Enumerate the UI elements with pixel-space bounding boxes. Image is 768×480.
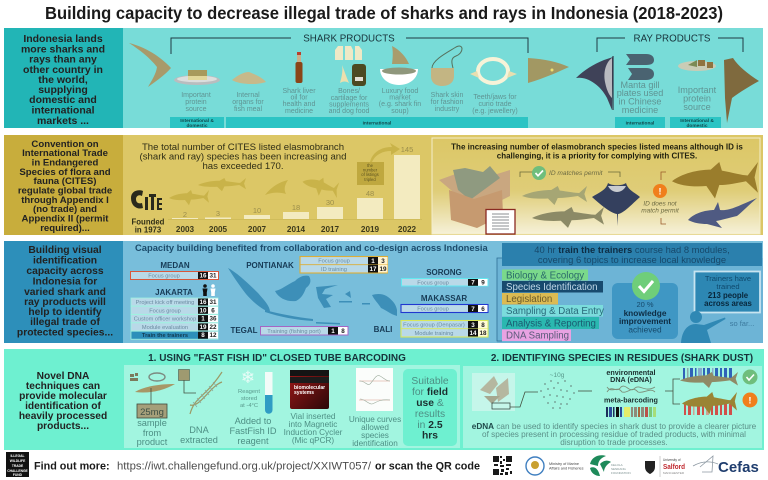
product labels: curio trade xyxy=(478,101,512,108)
product labels: organs for xyxy=(232,99,264,106)
city: Pontianak: ID training xyxy=(321,267,347,273)
shark silhouettes xyxy=(169,143,400,205)
product labels: source xyxy=(683,102,711,112)
panel: CITES lead text: (no trade) and xyxy=(33,204,97,215)
logo: foundation: KELOLA xyxy=(611,463,623,467)
find out more xyxy=(34,460,480,472)
product labels: medicine xyxy=(285,108,313,115)
callout: listings tripled xyxy=(357,162,384,185)
panel: shark and ray products xyxy=(4,28,763,129)
find out more: Find out more: xyxy=(34,460,110,472)
DNA lead text: products... xyxy=(37,421,89,432)
panel: CITES lead text: Appendix II (permit xyxy=(22,214,109,224)
eDNA meta-barcoding: environmental xyxy=(606,368,656,377)
step: reagent: stored xyxy=(241,396,257,402)
product labels: and dog food xyxy=(329,108,370,115)
non-matching sharks xyxy=(672,162,758,228)
product labels: (e.g. jewellery) xyxy=(472,108,518,115)
panel: DNA techniques xyxy=(4,349,764,450)
panel: products lead text: domestic and xyxy=(29,94,97,106)
logo: Cefas: Cefas xyxy=(718,459,759,476)
CITES chart heading: The total number of CITES listed elasmobranch xyxy=(142,142,344,153)
city: Jakarta: Focus group xyxy=(149,308,181,314)
product labels: protein xyxy=(683,94,711,104)
bar chart: CITES listings: 18 xyxy=(292,203,300,212)
trainer board: trained xyxy=(716,282,740,291)
city: Jakarta: Project kick off meeting xyxy=(136,300,194,306)
panel: products lead text: markets ... xyxy=(37,115,89,127)
so far label: so far... xyxy=(730,319,754,328)
course summary banner: covering 6 topics to increase local knowledge xyxy=(538,254,726,265)
step: sample from product: product xyxy=(137,437,168,447)
city: Sorong: 9 xyxy=(481,280,485,286)
step: unique curves: allowed xyxy=(361,423,389,432)
product labels: Internal xyxy=(236,92,260,99)
bar chart: CITES listings: 2014 xyxy=(287,225,306,234)
product labels: oil for xyxy=(290,94,308,102)
logo: Illegal Wildlife Trade Challenge Fund xyxy=(6,452,29,477)
product labels: medicine xyxy=(622,105,658,115)
step: sample from product xyxy=(130,373,175,447)
step: unique curves: species xyxy=(361,431,389,440)
icon: bones and cartilage xyxy=(335,46,366,86)
knowledge improvement callout: knowledge xyxy=(624,308,667,318)
step: Mic qPCR: biomolecular xyxy=(294,385,325,391)
panel: products lead text xyxy=(4,28,123,128)
bar chart: CITES listings: 3 xyxy=(216,209,220,218)
logo: Illegal Wildlife Trade Challenge Fund: WILDLIFE xyxy=(10,459,26,463)
trainer board: across areas xyxy=(704,299,753,308)
market tags: International & xyxy=(180,118,214,124)
DNA lead text xyxy=(19,371,107,432)
panel: train the trainers xyxy=(497,243,763,343)
product labels: soup) xyxy=(391,108,409,115)
city: Tegal: TEGAL xyxy=(230,326,258,335)
icon: people legend xyxy=(202,284,216,296)
matched shark with barcode xyxy=(680,368,758,388)
founded label: Founded xyxy=(132,218,165,226)
logo: Cefas xyxy=(693,456,759,476)
city: Medan xyxy=(130,261,218,280)
footer xyxy=(6,452,759,477)
manta ray illustration xyxy=(576,56,613,110)
step: reagent: Added to xyxy=(235,416,271,426)
product labels: in Chinese xyxy=(619,96,661,106)
panel: CITES lead text: through Appendix I xyxy=(21,195,109,206)
city: Tegal: 1 xyxy=(331,328,335,335)
CITES chart heading: (shark and ray) species has been increasing and xyxy=(140,152,346,162)
step: reagent: Reagent xyxy=(238,389,260,395)
panel: CITES lead text xyxy=(4,135,123,235)
product labels: fish meal xyxy=(234,106,262,113)
panel: CITES lead text: fauna (CITES) xyxy=(34,176,96,187)
find out more: or scan the QR code xyxy=(375,460,480,472)
city: Pontianak: 3 xyxy=(381,258,385,265)
city: Bali: Module training xyxy=(415,331,453,337)
step: Mic qPCR: systems xyxy=(294,390,314,396)
city: Jakarta: JAKARTA xyxy=(155,288,193,297)
logo: Illegal Wildlife Trade Challenge Fund: ILLEGAL xyxy=(10,454,25,458)
panel: CITES lead text: Species of flora and xyxy=(19,167,111,178)
map of Indonesia xyxy=(228,268,397,324)
city: Jakarta xyxy=(131,284,218,339)
panel: capacity lead text: ray products will xyxy=(24,297,106,308)
panel: capacity lead text: Building visual xyxy=(28,245,102,256)
city: Medan: Focus group xyxy=(148,274,180,280)
knowledge improvement callout: 20 % xyxy=(636,300,654,309)
knowledge improvement callout: achieved xyxy=(628,324,662,334)
knowledge improvement callout: improvement xyxy=(619,316,671,326)
trainer board: 213 people xyxy=(708,291,749,300)
icon: manta gill plates xyxy=(626,54,654,80)
panel: CITES lead text: Convention on xyxy=(31,139,99,150)
product labels: Luxury food xyxy=(382,88,418,95)
ID does not match permit: ! xyxy=(658,186,662,196)
mismatched shark with barcode xyxy=(682,392,758,415)
step: Mic qPCR: into Magnetic xyxy=(289,420,337,429)
callout: suitable for field use: hrs xyxy=(422,430,438,442)
logo: Illegal Wildlife Trade Challenge Fund: CHALLENGE xyxy=(7,469,29,473)
callout: suitable for field use: results xyxy=(415,409,445,420)
step: reagent: reagent xyxy=(237,436,269,446)
city: Makassar: 7 xyxy=(471,306,475,313)
eDNA description: eDNA can be used to identify species in shark dust to provide a clearer picture xyxy=(472,422,757,431)
panel: capacity lead text: varied shark and xyxy=(24,287,106,298)
barcode xyxy=(606,407,656,417)
city: Medan: 16 xyxy=(199,273,207,280)
city: Bali: 3 xyxy=(471,322,475,329)
panel: CITES lead text: in Endangered xyxy=(32,158,98,168)
product labels: source xyxy=(185,106,207,113)
city: Bali xyxy=(374,320,488,337)
panel: capacity lead text: identification xyxy=(33,256,97,266)
panel: capacity lead text: Indonesia for xyxy=(33,276,97,288)
panel: products lead text: other country in xyxy=(23,64,103,76)
city: Pontianak: PONTIANAK xyxy=(246,261,294,270)
product labels: Important xyxy=(181,92,211,99)
ray products heading bracket: RAY PRODUCTS xyxy=(634,34,711,44)
product labels: health and xyxy=(283,101,315,108)
course summary banner: 40 hr train the trainers course had 8 modules, xyxy=(534,244,730,255)
matching sharks xyxy=(522,183,640,228)
capacity heading: Capacity building benefited from collaboration and co-design across Indonesia xyxy=(135,242,488,253)
shark tail illustration xyxy=(129,43,171,87)
logo: Ministry of Marine Affairs and Fisheries: Affairs and Fisheries xyxy=(549,466,584,470)
ray wing illustration xyxy=(724,58,759,123)
ray products heading bracket xyxy=(597,34,743,52)
panel: CITES xyxy=(4,135,763,235)
panel: products lead text: more sharks and xyxy=(21,44,105,56)
ID does not match permit: match permit xyxy=(641,208,680,214)
city: Pontianak: 1 xyxy=(371,258,375,265)
product labels: Manta gill xyxy=(621,80,659,90)
panel: capacity lead text xyxy=(4,241,123,343)
panel: shark dust xyxy=(463,353,762,448)
icon: QR code xyxy=(493,456,512,475)
city: Pontianak: Focus group xyxy=(318,259,350,265)
DNA lead text: Novel DNA xyxy=(37,371,90,382)
callout: suitable for field use: in 2.5 xyxy=(417,420,443,431)
founded label xyxy=(132,218,165,234)
logo: Illegal Wildlife Trade Challenge Fund: FUND xyxy=(13,473,23,477)
city: Medan: MEDAN xyxy=(160,261,190,270)
callout: suitable for field use: for field xyxy=(412,387,448,398)
eDNA description: disruption to trade processes. xyxy=(560,438,668,447)
market tags: International xyxy=(363,120,391,126)
bar chart: CITES listings: 2 xyxy=(183,210,187,219)
bar chart: CITES listings: 2019 xyxy=(361,225,380,234)
product labels: plates used xyxy=(617,88,663,98)
city: Jakarta: 6 xyxy=(211,307,215,314)
trainer board xyxy=(694,272,760,312)
icon: fish meal xyxy=(232,72,266,84)
city: Jakarta: 19 xyxy=(199,324,207,331)
callout: listings tripled: tripled xyxy=(364,177,376,182)
bar chart: CITES listings: 2003 xyxy=(176,225,195,234)
DNA lead text: techniques can xyxy=(26,381,100,392)
bar chart: CITES listings xyxy=(168,145,422,234)
panel: fast fish ID xyxy=(124,353,460,448)
shark products heading bracket xyxy=(171,34,528,54)
panel: visual identification capacity xyxy=(4,241,763,343)
panel: ID priority xyxy=(432,138,760,234)
city: Bali: 18 xyxy=(479,330,487,337)
eDNA description xyxy=(472,422,757,447)
step: DNA extracted: DNA xyxy=(189,425,210,435)
logo: University of Salford: MANCHESTER xyxy=(663,471,685,475)
product labels: Teeth/jaws for xyxy=(473,94,517,101)
product labels: Bones/ xyxy=(338,88,360,95)
city: Jakarta: Custom officer workshop xyxy=(134,317,196,323)
city: Jakarta: Train the trainers xyxy=(142,333,188,339)
city: Tegal: Training (fishing port) xyxy=(267,329,321,335)
panel: products lead text: international xyxy=(31,104,95,116)
ID matches permit xyxy=(520,166,620,180)
city: Tegal xyxy=(230,326,348,335)
topic: DNA Sampling: DNA Sampling xyxy=(506,330,569,342)
callout: listings tripled: of listings xyxy=(361,172,379,177)
bar chart: CITES listings: 10 xyxy=(253,206,261,215)
city: Pontianak: 17 xyxy=(369,266,377,273)
city: Jakarta: 22 xyxy=(209,324,217,331)
heading: fast fish ID: 1. USING "FAST FISH ID" CLOSED TUBE BARCODING xyxy=(148,353,406,364)
logo: foundation: FOUNDATION xyxy=(611,471,631,475)
mismatched shark with barcode: ! xyxy=(748,396,752,406)
market tags xyxy=(170,117,721,129)
step: sample from product: 25mg xyxy=(140,407,164,418)
callout: suitable for field use xyxy=(403,369,457,446)
product labels: cartilage for xyxy=(331,95,368,102)
bar chart: CITES listings: 2005 xyxy=(209,225,228,234)
bar chart: CITES listings: 145 xyxy=(401,145,413,154)
bar chart: CITES listings: 2017 xyxy=(321,225,340,234)
panel: ID priority: The increasing number of elasmobranch species listed means although ID is xyxy=(451,142,743,152)
shark head illustration xyxy=(528,58,569,83)
step: sample from product: from xyxy=(143,428,162,438)
step: Mic qPCR xyxy=(284,370,343,445)
step: unique curves: Unique curves xyxy=(349,415,401,424)
city: Sorong: SORONG xyxy=(426,268,462,277)
step: reagent: ❄ xyxy=(241,368,255,388)
callout: suitable for field use: Suitable xyxy=(411,376,449,387)
step: reagent xyxy=(230,368,277,446)
city: Pontianak xyxy=(246,256,388,273)
topic: Analysis and Reporting: Analysis & Reporting xyxy=(506,318,596,329)
image: shark dust residue xyxy=(472,373,538,411)
product labels: market xyxy=(389,94,411,102)
city: Sorong: Focus group xyxy=(417,280,449,286)
step: Mic qPCR: (Mic qPCR) xyxy=(292,436,334,445)
step: reagent: FastFish ID xyxy=(230,426,277,436)
logo: Ministry of Marine Affairs and Fisheries: Ministry of Marine xyxy=(549,462,579,466)
city: Makassar xyxy=(401,294,488,313)
panel: products lead text: rays than any xyxy=(29,54,97,66)
city: Jakarta: 1 xyxy=(201,316,205,323)
ID does not match permit: ID does not xyxy=(643,200,678,208)
trainer board: Trainers have xyxy=(705,274,751,283)
step: unique curves: identification xyxy=(352,439,398,448)
knowledge improvement callout xyxy=(612,272,678,339)
step: DNA extracted xyxy=(178,370,222,445)
panel: CITES lead text: International Trade xyxy=(22,148,108,159)
topic: Legislation: Legislation xyxy=(506,294,552,305)
step: Mic qPCR: Induction Cycler xyxy=(284,428,343,437)
step: unique curves xyxy=(349,368,401,448)
logo: University of Salford xyxy=(645,456,685,477)
city: Sorong: 7 xyxy=(471,280,475,286)
icon: permit document xyxy=(486,210,515,234)
icon: dust particles 10g xyxy=(540,372,592,409)
step: reagent: at -4°C xyxy=(240,403,258,409)
city: Jakarta: 8 xyxy=(201,332,205,339)
panel: capacity lead text: help to identify xyxy=(28,307,102,318)
product labels: Important xyxy=(678,85,717,95)
panel: products lead text: the world, xyxy=(38,74,88,86)
icon: cardboard box xyxy=(439,166,510,228)
logo: foundation xyxy=(590,455,631,476)
callout: listings tripled: the xyxy=(367,163,374,168)
founded label: in 1973 xyxy=(135,226,162,234)
city: Jakarta: 12 xyxy=(209,332,217,339)
product labels: for fashion xyxy=(431,99,463,106)
icon: shark fin soup xyxy=(380,46,418,85)
title: Building capacity to decrease illegal trade of sharks and rays in Indonesia (2018-2023) xyxy=(45,3,723,23)
product labels: (e.g. shark fin xyxy=(379,101,421,108)
ID matches permit: ID matches permit xyxy=(549,170,604,177)
topic: Species Identification: Species Identification xyxy=(506,282,598,293)
DNA lead text: heavily processed xyxy=(19,411,107,422)
eDNA description: of species present in processing residue of traded products, with minimal xyxy=(482,430,746,439)
bar chart: CITES listings: 2022 xyxy=(398,225,417,234)
course summary banner xyxy=(502,243,762,266)
callout: listings tripled: number xyxy=(363,168,378,172)
icon: trainer figure xyxy=(681,311,726,343)
icon: protein plate xyxy=(174,70,220,85)
city: Medan: 31 xyxy=(209,273,217,280)
product labels: protein xyxy=(185,99,207,106)
panel: capacity lead text: illegal trade of xyxy=(30,317,100,328)
ID does not match permit xyxy=(641,172,680,224)
product labels: industry xyxy=(435,106,460,113)
shark products heading bracket: SHARK PRODUCTS xyxy=(303,34,395,44)
panel: ID priority: challenging, it is a priority for complying with CITES. xyxy=(497,152,697,160)
eDNA meta-barcoding: DNA (eDNA) xyxy=(610,375,652,384)
city: Jakarta: 10 xyxy=(199,307,207,314)
panel: capacity lead text: protected species... xyxy=(17,328,113,338)
city: Bali: BALI xyxy=(374,325,392,334)
city: Sorong xyxy=(402,268,488,286)
city: Bali: 14 xyxy=(469,330,477,337)
bar chart: CITES listings: 30 xyxy=(326,198,334,207)
panel: CITES lead text: required)... xyxy=(40,223,90,234)
product labels: Shark liver xyxy=(282,88,316,95)
market tags: domestic xyxy=(186,123,208,129)
city: Makassar: MAKASSAR xyxy=(421,294,467,303)
icon: CITES logo xyxy=(131,190,162,210)
logo: foundation: SENDANG xyxy=(611,467,627,471)
topic: Sampling and Data Entry: Sampling & Data Entry xyxy=(506,306,604,317)
step: DNA extracted: extracted xyxy=(180,435,218,445)
DNA lead text: provide molecular xyxy=(19,391,107,402)
city: Makassar: 6 xyxy=(481,306,485,313)
market tags: domestic xyxy=(686,123,708,129)
heading: shark dust: 2. IDENTIFYING SPECIES IN RESIDUES (SHARK DUST) xyxy=(491,353,753,364)
DNA lead text: identification of xyxy=(25,401,102,412)
step: Mic qPCR: Vial inserted xyxy=(291,412,336,421)
city: Tegal: 8 xyxy=(341,328,345,335)
city: Bali: Focus group (Denpasar) xyxy=(403,323,465,329)
market tags: International xyxy=(626,120,654,126)
icon: dust particles 10g: ~10g xyxy=(550,372,565,379)
icon: shark skin bag xyxy=(431,46,462,86)
icon: shark jaws xyxy=(470,59,517,83)
eDNA meta-barcoding: meta-barcoding xyxy=(604,396,658,404)
CITES chart heading: has exceeded 170. xyxy=(202,161,284,172)
city: Jakarta: Module evaluation xyxy=(142,325,188,331)
city: Pontianak: 19 xyxy=(379,266,387,273)
city: Bali: 8 xyxy=(481,322,485,329)
market tags: International & xyxy=(680,118,714,124)
city: Jakarta: 16 xyxy=(199,299,207,306)
icon: ray meat plate xyxy=(678,60,716,71)
panel: products lead text: supplying xyxy=(38,84,88,96)
city: Jakarta: 36 xyxy=(209,316,217,323)
product labels: Shark skin xyxy=(431,92,463,99)
bar chart: CITES listings: 2007 xyxy=(248,225,267,234)
step: sample from product: sample xyxy=(137,418,167,428)
logo: University of Salford: University of xyxy=(663,458,681,462)
logo: University of Salford: Salford xyxy=(663,464,685,471)
city: Jakarta: 31 xyxy=(209,299,217,306)
product labels xyxy=(181,80,717,115)
panel: products lead text: Indonesia lands xyxy=(23,33,103,45)
eDNA meta-barcoding xyxy=(604,368,680,417)
CITES chart heading xyxy=(140,142,346,172)
panel: capacity lead text: capacity across xyxy=(26,266,104,277)
bar chart: CITES listings: 48 xyxy=(366,189,374,198)
logo: Ministry of Marine Affairs and Fisheries xyxy=(526,457,584,475)
find out more: https://iwt.challengefund.org.uk/project/XXIWT057/ xyxy=(117,460,371,472)
product labels: supplements xyxy=(329,102,369,108)
city: Makassar: Focus group xyxy=(417,306,449,312)
icon: shark liver oil bottle xyxy=(296,52,302,83)
logo: Illegal Wildlife Trade Challenge Fund: TRADE xyxy=(12,464,24,468)
panel: CITES lead text: regulate global trade xyxy=(18,186,112,196)
callout: suitable for field use: use & xyxy=(416,398,444,409)
topic: Biology and Ecology: Biology & Ecology xyxy=(506,270,584,281)
